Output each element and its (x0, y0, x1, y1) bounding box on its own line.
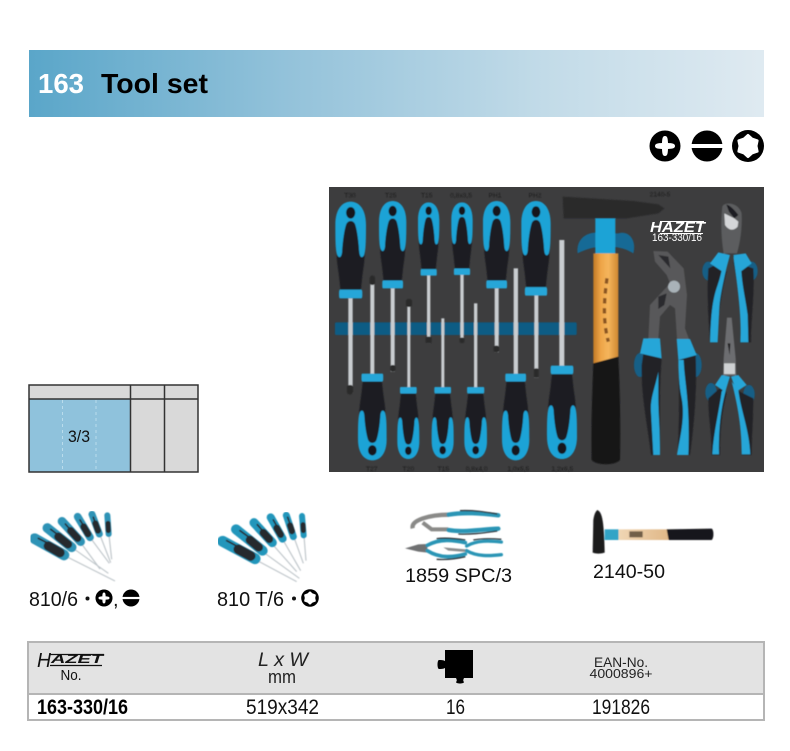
product: pliers set 1859 SPC/3 (405, 511, 512, 587)
tray logo: 163-330/16 (652, 232, 702, 244)
tray labels bottom: 1,2x6,5 (551, 466, 574, 473)
column header: dimensions: L x W (258, 650, 310, 671)
product: screwdriver set 810/6 (29, 514, 140, 611)
drawer layout diagram (29, 385, 198, 472)
title banner (29, 50, 764, 117)
tray labels top: T30 (344, 192, 356, 199)
HAZET logo: AZET (49, 652, 106, 666)
icon: screw drive types (650, 130, 764, 162)
hammer (563, 197, 664, 464)
cutting pliers (702, 203, 758, 342)
screwdriver shafts (348, 240, 564, 393)
screwdriver handles top row (335, 201, 551, 298)
title number: 163 (38, 68, 84, 99)
tray labels top: PH1 (489, 192, 502, 199)
foam slot strip (335, 322, 577, 335)
tray labels top: 0,8x3,5 (450, 192, 472, 199)
caption 810/6: 810/6 (29, 589, 78, 611)
tray labels bottom: 0,8x4,0 (466, 466, 488, 473)
value: dimensions: 519x342 (246, 696, 319, 719)
tray labels bottom: T15 (438, 466, 449, 473)
caption 810 T/6: 810 T/6 (217, 589, 284, 611)
tray labels top (344, 192, 671, 199)
panel: tool tray photo (329, 187, 764, 473)
water pump pliers (634, 251, 702, 455)
tray logo (650, 219, 707, 244)
tray logo: HAZET (650, 219, 707, 236)
HAZET logo (37, 650, 106, 672)
tray labels top: T25 (385, 192, 397, 199)
product: screwdriver set 810 T/6 (217, 515, 319, 611)
caption 2140-50: 2140-50 (593, 561, 665, 583)
tray labels bottom: 1,0x5,5 (507, 466, 530, 473)
EAN prefix: 4000896+ (590, 666, 652, 681)
column header: No.: No. (60, 667, 82, 684)
icon: puzzle piece tool count (438, 650, 473, 684)
value: article number: 163-330/16 (37, 696, 128, 719)
icon: torx (301, 589, 319, 607)
specification table (28, 642, 764, 720)
icon: slot (122, 589, 140, 607)
tray labels top: 2140-5 (650, 192, 671, 199)
tray labels top: T15 (421, 192, 433, 199)
value: EAN: 191826 (592, 696, 650, 719)
HAZET logo: H (37, 650, 52, 672)
product: hammer 2140-50 (593, 510, 713, 583)
tray labels bottom: T27 (366, 466, 378, 473)
tray labels bottom: T20 (403, 466, 414, 473)
screwdriver tips (347, 276, 539, 394)
column header: mm: mm (268, 667, 296, 687)
caption 1859 SPC/3: 1859 SPC/3 (405, 565, 512, 587)
product: screwdriver set 810/6: , (113, 589, 119, 611)
title text: Tool set (101, 68, 208, 99)
needle nose pliers (705, 318, 755, 455)
screwdriver handles bottom row (358, 366, 577, 460)
value: tool count: 16 (446, 696, 465, 719)
tray labels bottom (366, 466, 574, 473)
drawer label: 3/3 (68, 427, 90, 446)
tray labels top: PH2 (529, 192, 542, 199)
icon: cross (95, 589, 113, 607)
column header: EAN: EAN-No. (594, 654, 648, 670)
